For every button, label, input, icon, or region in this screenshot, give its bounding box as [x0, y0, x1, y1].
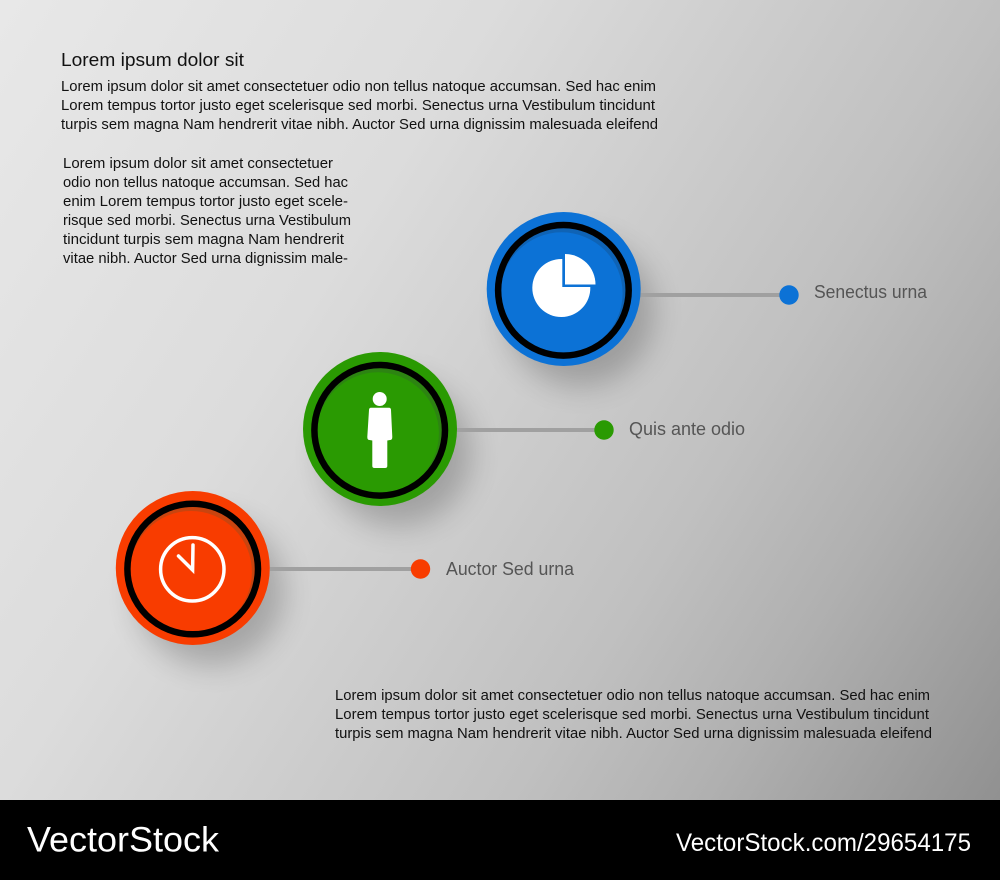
icon: pie chart [532, 254, 596, 317]
side paragraph: vitae nibh. Auctor Sed urna dignissim male- [63, 250, 348, 267]
bottom paragraph: Lorem ipsum dolor sit amet consectetuer odio non tellus natoque accumsan. Sed hac enim [335, 687, 930, 704]
title: Lorem ipsum dolor sit [61, 49, 244, 70]
intro paragraph [61, 78, 658, 133]
bottom paragraph: Lorem tempus tortor justo eget scelerisque sed morbi. Senectus urna Vestibulum tincidunt [335, 706, 930, 723]
footer url: VectorStock.com/29654175 [676, 829, 971, 857]
label: Auctor Sed urna: Auctor Sed urna [446, 559, 575, 579]
side paragraph [63, 155, 351, 267]
intro paragraph: Lorem ipsum dolor sit amet consectetuer odio non tellus natoque accumsan. Sed hac enim [61, 78, 656, 95]
step: green person [303, 352, 614, 526]
side paragraph: odio non tellus natoque accumsan. Sed hac [63, 174, 348, 191]
intro paragraph: Lorem tempus tortor justo eget scelerisque sed morbi. Senectus urna Vestibulum tincidunt [61, 97, 656, 114]
side paragraph: tincidunt turpis sem magna Nam hendrerit [63, 231, 345, 248]
side paragraph: risque sed morbi. Senectus urna Vestibulum [63, 212, 351, 229]
icon: person [367, 392, 392, 468]
step: blue pie chart [487, 212, 799, 386]
step: red clock [116, 491, 430, 665]
label: Quis ante odio: Quis ante odio [629, 419, 745, 439]
bottom paragraph [335, 687, 932, 742]
side paragraph: enim Lorem tempus tortor justo eget scele- [63, 193, 348, 210]
footer brand: VectorStock [27, 820, 219, 860]
icon: clock [161, 538, 224, 601]
footer bar [0, 800, 1000, 880]
label: Senectus urna: Senectus urna [814, 282, 928, 302]
bottom paragraph: turpis sem magna Nam hendrerit vitae nibh. Auctor Sed urna dignissim malesuada eleifend [335, 725, 932, 742]
side paragraph: Lorem ipsum dolor sit amet consectetuer [63, 155, 333, 172]
intro paragraph: turpis sem magna Nam hendrerit vitae nibh. Auctor Sed urna dignissim malesuada eleifend [61, 116, 658, 133]
